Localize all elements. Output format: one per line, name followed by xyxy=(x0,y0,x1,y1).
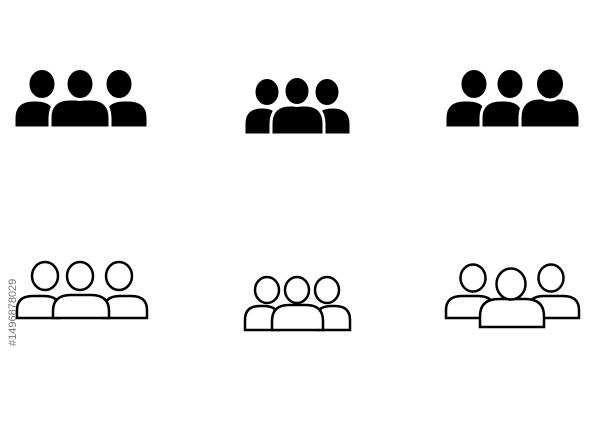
icon: filled group 3 xyxy=(445,68,580,128)
icon: filled group 2 xyxy=(244,76,351,135)
icon: outline group 2 xyxy=(245,277,350,330)
icon: outline group 1 xyxy=(17,262,147,318)
icon: outline group 3 xyxy=(446,264,579,327)
stock id text: #1496878029 xyxy=(7,279,19,346)
icon: filled group 1 xyxy=(14,68,148,128)
